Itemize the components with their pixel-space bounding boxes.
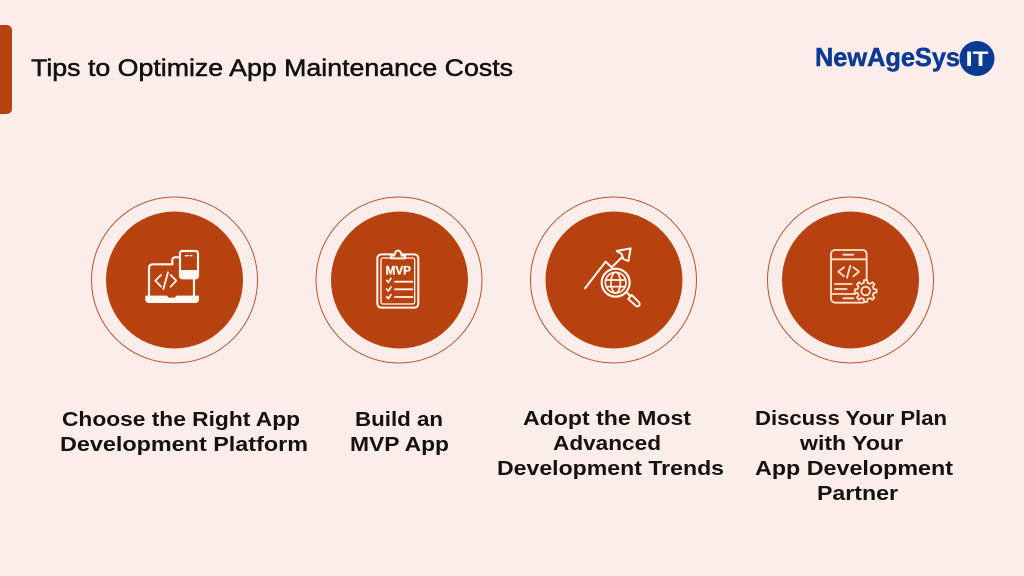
label 4: App Development (755, 457, 953, 480)
circle badge 2 (316, 197, 482, 363)
circle badge 1 (92, 197, 258, 363)
label 1 (60, 408, 308, 456)
label 4 (755, 407, 953, 505)
label 4: Partner (817, 482, 898, 505)
label 2: Build an (355, 408, 443, 431)
icon: MVP clipboard: MVP (386, 264, 411, 277)
circle badge 4 (768, 197, 934, 363)
label 3: Advanced (553, 432, 661, 455)
label 4: Discuss Your Plan (755, 407, 947, 430)
icon: phone with code and gear (831, 250, 877, 303)
label 2 (350, 408, 449, 456)
label 3: Adopt the Most (523, 407, 691, 430)
label 3: Development Trends (497, 457, 724, 480)
panel: discuss plan (755, 197, 953, 505)
accent bar (0, 25, 12, 114)
label 1: Choose the Right App (62, 408, 300, 431)
panel: choose platform (60, 197, 308, 456)
logo: IT (966, 48, 989, 71)
label 2: MVP App (350, 433, 449, 456)
icon: trend arrow and globe (585, 248, 640, 306)
label 3 (497, 407, 724, 480)
title: Tips to Optimize App Maintenance Costs (31, 55, 513, 82)
logo: NewAgeSys (815, 42, 960, 72)
panel: build MVP (316, 197, 482, 456)
label 1: Development Platform (60, 433, 308, 456)
icon: MVP clipboard (377, 251, 418, 308)
label 4: with Your (799, 432, 903, 455)
circle badge 3 (530, 197, 696, 363)
icon: laptop and phone (146, 251, 199, 303)
panel: advanced trends (497, 197, 724, 480)
